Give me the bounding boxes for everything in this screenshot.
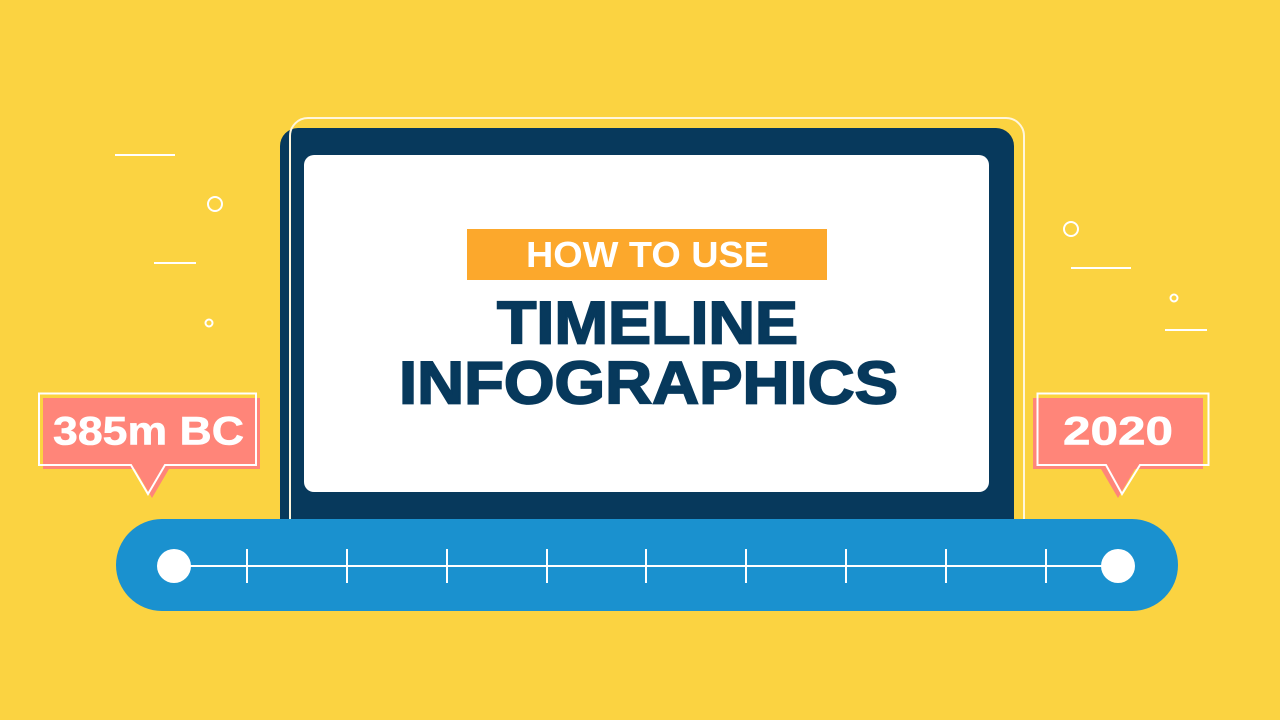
subtitle banner [467, 229, 827, 280]
title [399, 290, 898, 416]
laptop offset outline [290, 118, 1024, 519]
callout: 385m BC [39, 394, 260, 498]
decorative sparks left [115, 155, 222, 326]
decorative sparks right [1064, 222, 1207, 330]
laptop [280, 118, 1024, 519]
timeline bar [116, 519, 1178, 611]
subtitle banner: HOW TO USE [526, 234, 769, 275]
laptop screen [304, 155, 989, 492]
title: TIMELINE [497, 290, 798, 356]
callout: 2020 [1033, 394, 1208, 498]
callout: 385m BC: 385m BC [53, 410, 244, 454]
callout: 2020: 2020 [1063, 410, 1173, 454]
laptop body [280, 128, 1014, 519]
title: INFOGRAPHICS [399, 350, 898, 416]
